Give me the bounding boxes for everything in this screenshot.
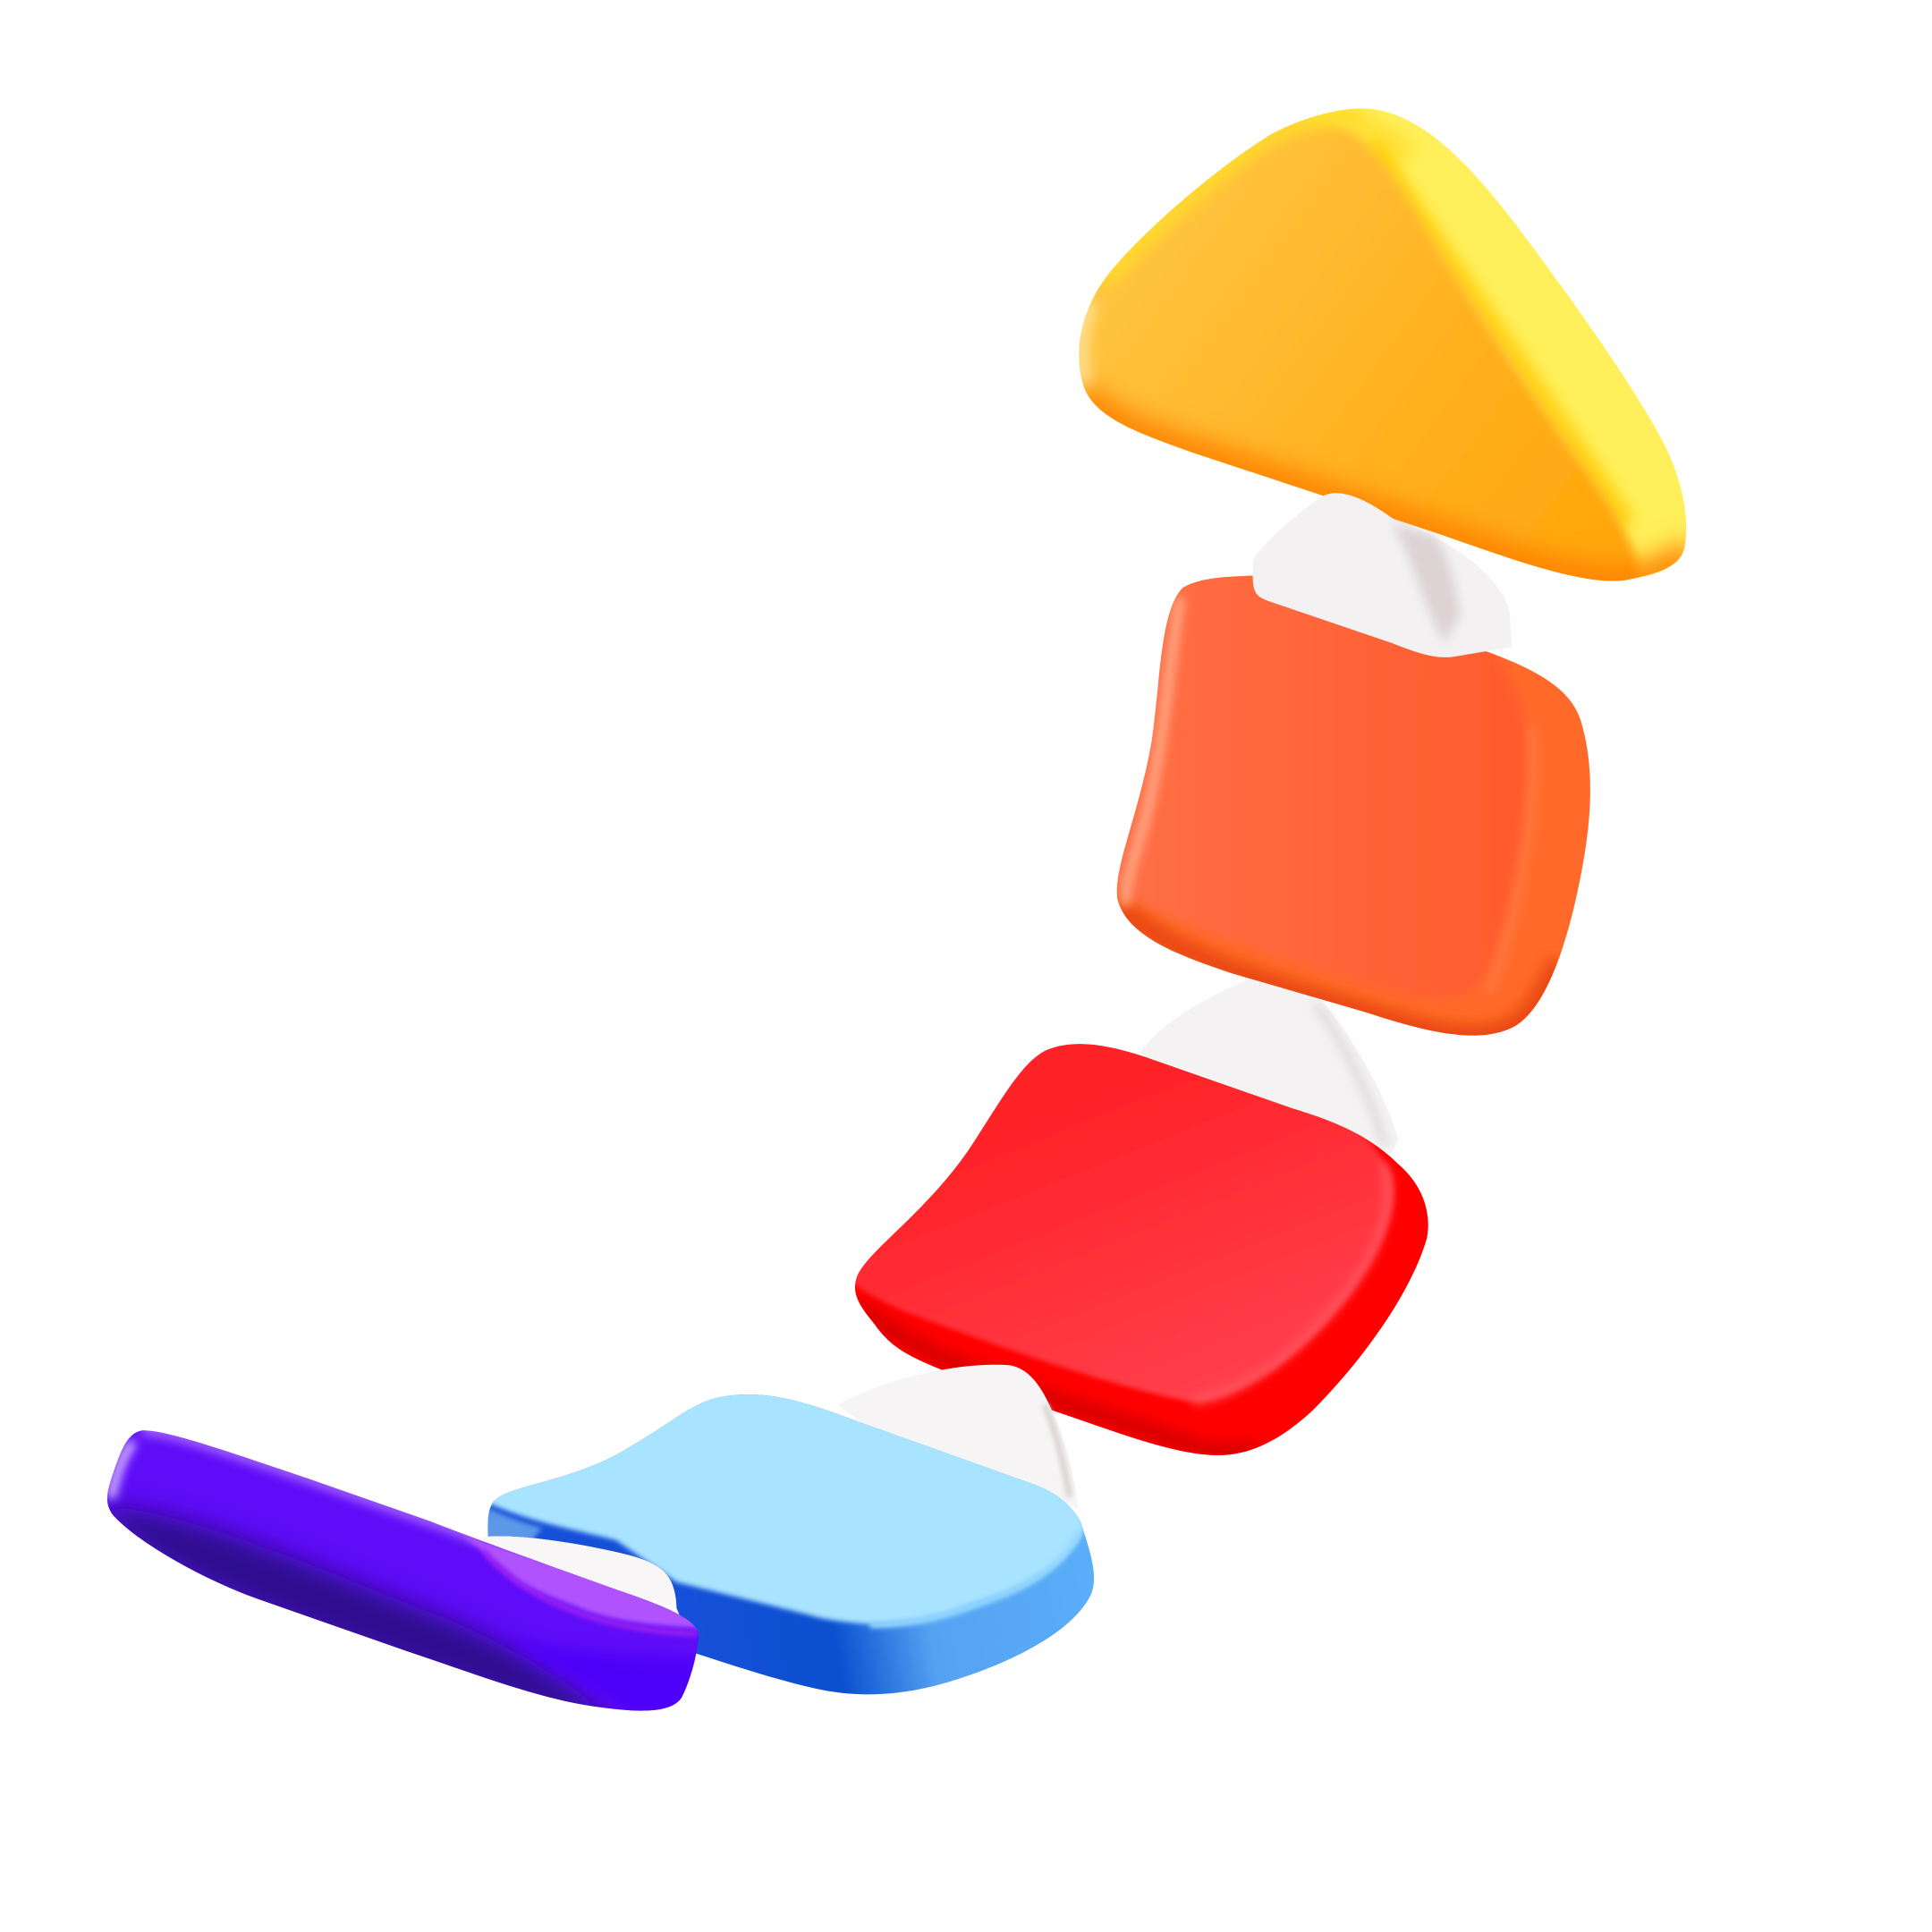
front face (851, 1022, 1394, 1402)
top edge (1103, 116, 1361, 281)
white connector: between orange and yellow blocks (1253, 493, 1512, 657)
front face (480, 1379, 1084, 1624)
edge highlight (870, 1531, 1080, 1625)
white connector: between purple and blue blocks (468, 1536, 676, 1608)
bottom edge (1115, 905, 1559, 1036)
white connector peak over yellow edge (1322, 493, 1394, 520)
illustration: stacked 3D blocks (107, 108, 1687, 1711)
front face (1102, 555, 1529, 998)
purple block (98, 1430, 708, 1719)
yellow triangle block (1053, 107, 1688, 604)
side ridge (1488, 727, 1533, 992)
front face (1053, 111, 1638, 604)
dark lower band (98, 1505, 616, 1719)
left side (487, 1506, 543, 1538)
white connector: between orange and red blocks (1140, 975, 1399, 1156)
blue glow bottom right (515, 1645, 696, 1711)
top side tint (1306, 107, 1417, 173)
magenta crease (483, 1550, 698, 1634)
orange block (1102, 555, 1590, 1036)
white connector: between blue and red blocks (838, 1365, 1078, 1510)
bottom orange edge (1084, 392, 1688, 581)
edge highlight (1192, 1165, 1388, 1401)
left highlight (111, 1442, 133, 1498)
red block (851, 1022, 1428, 1455)
light right plate (462, 1534, 708, 1632)
upper lilac edge (141, 1430, 480, 1540)
bottom shade (862, 1306, 1257, 1452)
connector shadow (1393, 523, 1460, 643)
left pale highlight (1080, 302, 1090, 388)
left highlight (1126, 597, 1181, 905)
gold ridge (1373, 141, 1629, 523)
blue block (480, 1379, 1094, 1694)
